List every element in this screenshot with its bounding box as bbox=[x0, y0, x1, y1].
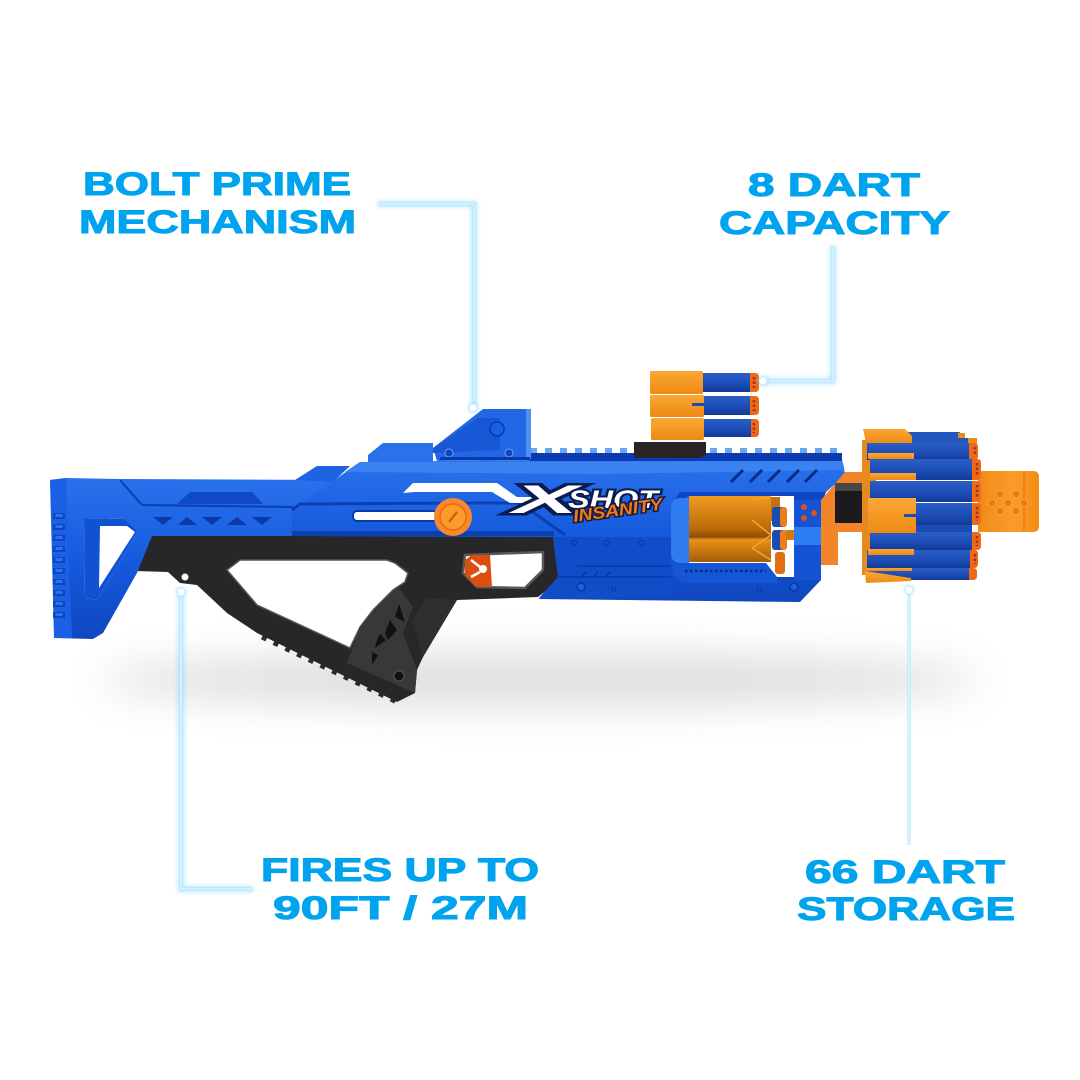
cylinder ring bbox=[671, 498, 689, 563]
ground shadow bbox=[100, 654, 980, 706]
orange muzzle bbox=[978, 471, 1039, 532]
top rail bbox=[530, 448, 842, 453]
spare darts bbox=[703, 373, 759, 437]
drum orange clips bbox=[863, 429, 916, 583]
vent slots bbox=[731, 470, 817, 482]
label: bolt prime mechanism: MECHANISM bbox=[79, 204, 356, 240]
sight block bbox=[433, 409, 531, 461]
label: fires up to 90ft / 27m: FIRES UP TO bbox=[261, 852, 539, 888]
stock bbox=[50, 478, 345, 639]
blaster bbox=[50, 371, 1039, 702]
label: 8 dart capacity: 8 DART bbox=[748, 167, 921, 203]
barrel bbox=[821, 472, 865, 565]
frame openings bbox=[227, 560, 408, 648]
logo: X-Shot Insanity: SHOT bbox=[568, 486, 662, 514]
label: 8 dart capacity bbox=[719, 167, 950, 241]
label: 66 dart storage bbox=[797, 854, 1015, 927]
label: fires up to 90ft / 27m: 90FT / 27M bbox=[273, 890, 528, 926]
revolver window bbox=[577, 492, 826, 591]
callout line: range bbox=[176, 587, 253, 889]
lower body panel details bbox=[558, 540, 761, 592]
label: fires up to 90ft / 27m bbox=[261, 852, 539, 926]
label: 8 dart capacity: CAPACITY bbox=[719, 205, 950, 241]
callout line: dart capacity bbox=[758, 246, 833, 386]
main body bbox=[292, 409, 845, 602]
drum darts bbox=[867, 432, 981, 580]
rail mount bbox=[634, 442, 706, 458]
label: 66 dart storage: 66 DART bbox=[805, 854, 1006, 890]
white stripe decal bbox=[403, 483, 540, 503]
sling mount hole bbox=[182, 574, 188, 580]
callout line: dart storage bbox=[904, 585, 914, 845]
pistol grip bbox=[347, 587, 417, 693]
logo: X-Shot Insanity: INSANITY bbox=[572, 494, 666, 526]
trigger bbox=[465, 555, 492, 587]
callout line: bolt prime bbox=[378, 204, 478, 413]
orange cylinder bbox=[689, 496, 771, 562]
label: bolt prime mechanism: BOLT PRIME bbox=[83, 166, 351, 202]
black frame and foregrip bbox=[135, 534, 560, 702]
butt plate ridges bbox=[53, 513, 65, 618]
dart drum bbox=[862, 429, 981, 583]
spare dart clip bbox=[650, 371, 759, 440]
front frame post bbox=[794, 500, 821, 580]
bolt slot bbox=[353, 511, 437, 521]
label: 66 dart storage: STORAGE bbox=[797, 891, 1015, 927]
label: bolt prime mechanism bbox=[79, 166, 356, 240]
logo: X-Shot Insanity bbox=[508, 478, 666, 526]
bolt handle bbox=[434, 498, 472, 536]
cover plate bbox=[673, 563, 777, 583]
logo: X-Shot Insanity: X bbox=[508, 478, 584, 522]
stock triangle cutouts bbox=[153, 517, 272, 525]
